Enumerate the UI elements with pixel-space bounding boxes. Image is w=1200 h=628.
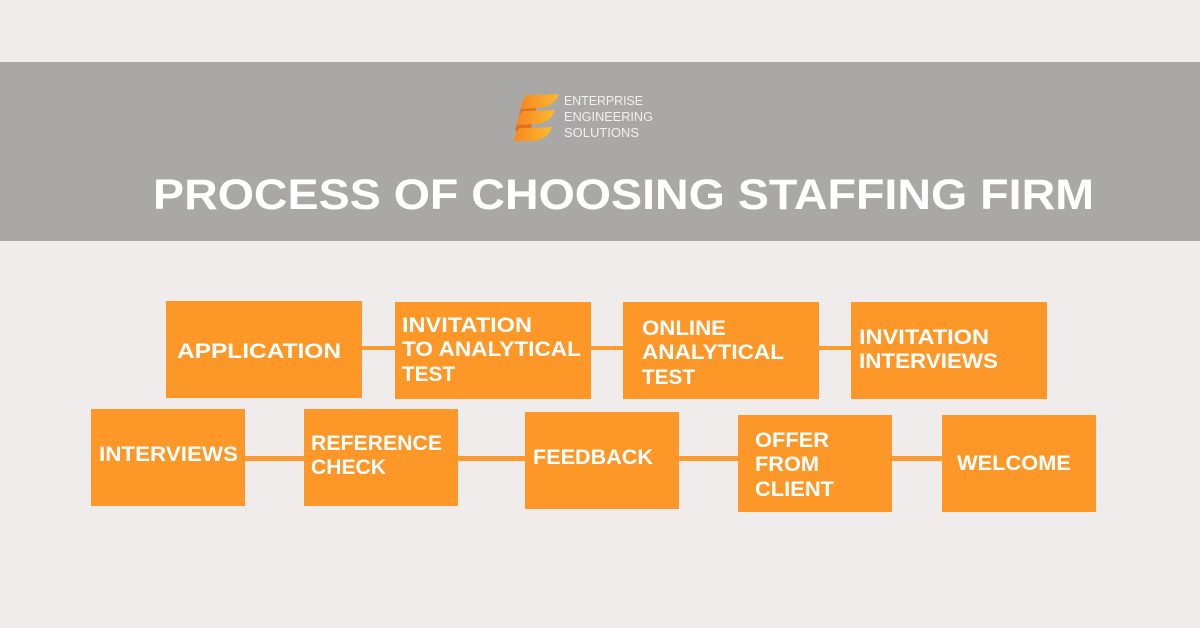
step: online analytical test: ANALYTICAL [642,340,784,364]
connectors: bottom row [243,456,944,461]
step: application [166,301,362,398]
connectors: top row [360,346,853,350]
logo text [564,94,653,140]
step: welcome [942,415,1096,512]
step: offer from client: CLIENT [755,477,834,501]
step: feedback: FEEDBACK [533,445,653,469]
step: invitation to analytical test: INVITATION [402,313,532,337]
step: feedback [525,412,679,509]
step: invitation interviews [851,302,1047,399]
logo text: SOLUTIONS [564,126,639,140]
step: reference check: CHECK [311,455,386,479]
step: welcome: WELCOME [957,451,1071,475]
step: offer from client [738,415,892,512]
icon: logo mark [514,94,559,141]
step: invitation to analytical test: TO ANALYTICAL [402,337,581,361]
step: invitation to analytical test [395,302,591,399]
step: application: APPLICATION [177,339,341,363]
logo [514,94,653,141]
logo text: ENGINEERING [564,110,653,124]
step: invitation interviews: INVITATION [859,325,989,349]
step: reference check [304,409,458,506]
step: online analytical test: TEST [642,365,695,389]
step: online analytical test [623,302,819,399]
step: interviews: INTERVIEWS [99,442,238,466]
step: reference check: REFERENCE [311,431,442,455]
step: invitation to analytical test: TEST [402,362,455,386]
step: offer from client: FROM [755,452,819,476]
step: interviews [91,409,245,506]
logo text: ENTERPRISE [564,94,643,108]
step: online analytical test: ONLINE [642,316,726,340]
step: invitation interviews: INTERVIEWS [859,349,998,373]
step: offer from client: OFFER [755,428,829,452]
header band [0,62,1200,241]
title: PROCESS OF CHOOSING STAFFING FIRM [153,171,1094,219]
